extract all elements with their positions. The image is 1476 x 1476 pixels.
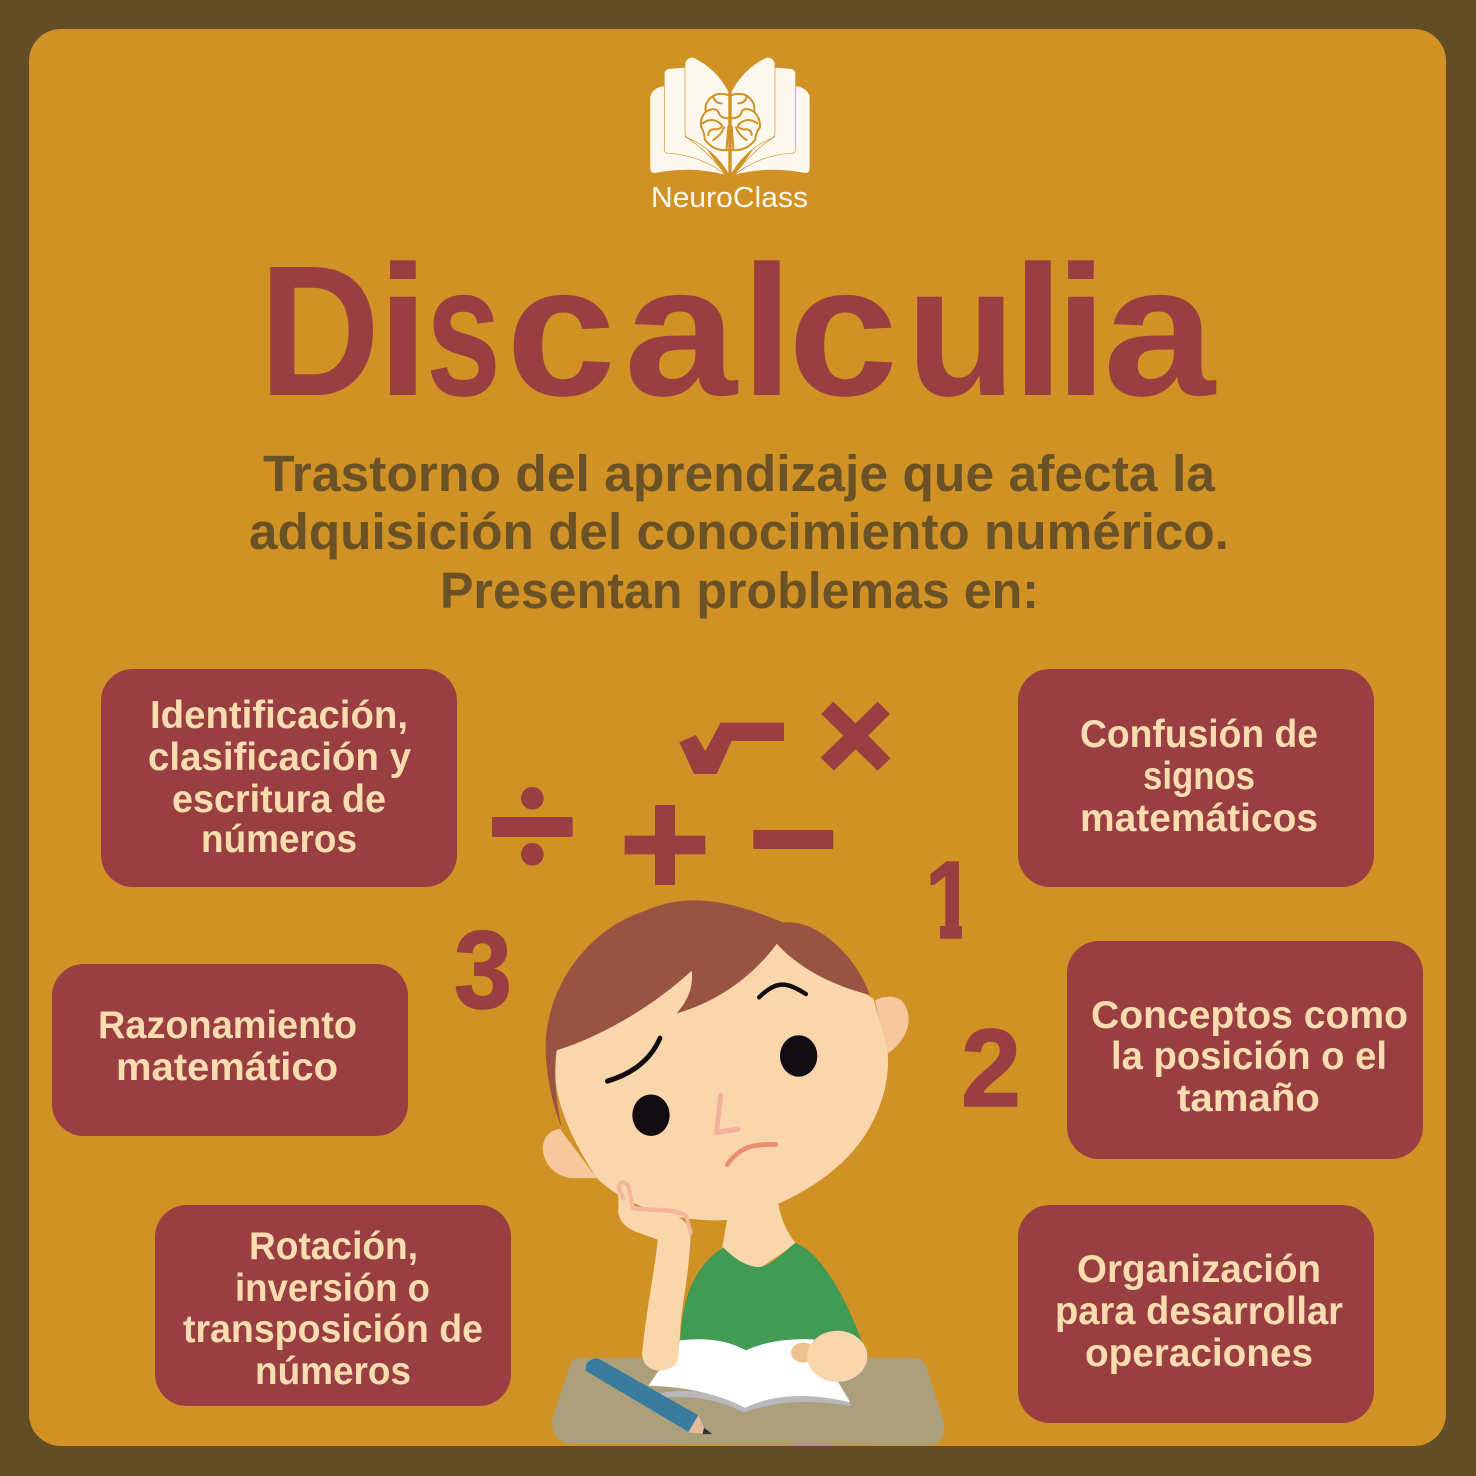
icon: square root [679, 723, 784, 774]
panel: razonamiento: Razonamiento [98, 1004, 357, 1047]
finger outline [619, 1182, 691, 1233]
mouth [727, 1144, 776, 1164]
panel: conceptos: Conceptos como [1091, 994, 1408, 1037]
pencil [586, 1358, 712, 1434]
title: i [377, 228, 429, 435]
panel: conceptos: tamaño [1177, 1077, 1320, 1120]
number 3: 3 [454, 909, 512, 1032]
arm and hand on chin [618, 1182, 692, 1371]
panel: confusión de signos: matemáticos [1080, 797, 1318, 840]
panel: identificación: números [201, 818, 357, 861]
shirt [680, 1243, 864, 1354]
neck [722, 1204, 796, 1273]
panel: rotación: Rotación, [249, 1225, 418, 1268]
desk [552, 1358, 944, 1446]
panel: organización [1018, 1205, 1374, 1423]
panel: organización: Organización [1077, 1248, 1321, 1291]
panel: conceptos: la posición o el [1111, 1035, 1387, 1078]
icon: multiply [821, 702, 891, 771]
title: s [426, 228, 501, 435]
panel: rotación: números [255, 1350, 411, 1393]
face [554, 943, 888, 1220]
panel: confusión de signos: Confusión de [1080, 713, 1318, 756]
hair [546, 900, 870, 1127]
math symbols [492, 702, 891, 885]
title: u [906, 228, 1016, 435]
panel: identificación: Identificación, [150, 694, 408, 737]
panel: identificación: clasificación y [148, 736, 411, 779]
icon: plus [625, 805, 705, 885]
panel: razonamiento: matemático [116, 1046, 338, 1089]
panel: conceptos [1067, 941, 1423, 1159]
panel: rotación: transposición de [183, 1308, 483, 1351]
panel: organización: para desarrollar [1055, 1290, 1343, 1333]
panel: confusión de signos: signos [1143, 755, 1255, 798]
title: a [1103, 228, 1217, 435]
subtitle text block [249, 445, 1229, 619]
subtitle text block: Presentan problemas en: [440, 562, 1039, 619]
nose [717, 1096, 738, 1133]
panel: rotación: inversión o [235, 1267, 430, 1310]
title: c [506, 228, 616, 435]
number 2: 2 [961, 1007, 1021, 1130]
title: l [741, 228, 793, 435]
panel: identificación [101, 669, 457, 887]
right hand on book [791, 1331, 867, 1382]
title: l [1012, 228, 1064, 435]
panel: razonamiento [52, 964, 408, 1136]
icon: divide [492, 787, 573, 866]
logo wordmark: NeuroClass [651, 182, 808, 214]
panel: organización: operaciones [1085, 1332, 1313, 1375]
eyebrows [607, 985, 806, 1081]
panel: identificación: escritura de [172, 778, 386, 821]
panel: confusión de signos [1018, 669, 1374, 887]
illustration: thinking boy at desk [543, 900, 944, 1446]
ears [543, 997, 909, 1178]
icon: open book with brain [650, 57, 810, 175]
title: D [259, 228, 380, 435]
icon: minus [753, 830, 833, 849]
panel: rotación [155, 1205, 511, 1406]
subtitle text block: Trastorno del aprendizaje que afecta la [263, 445, 1216, 502]
title: a [624, 228, 739, 435]
logo: NeuroClass [650, 57, 810, 214]
number 1: 1 [925, 839, 975, 962]
title: c [788, 228, 898, 435]
subtitle text block: adquisición del conocimiento numérico. [249, 503, 1229, 560]
eyes [632, 1035, 817, 1136]
open book [648, 1339, 851, 1413]
title: i [1055, 228, 1107, 435]
